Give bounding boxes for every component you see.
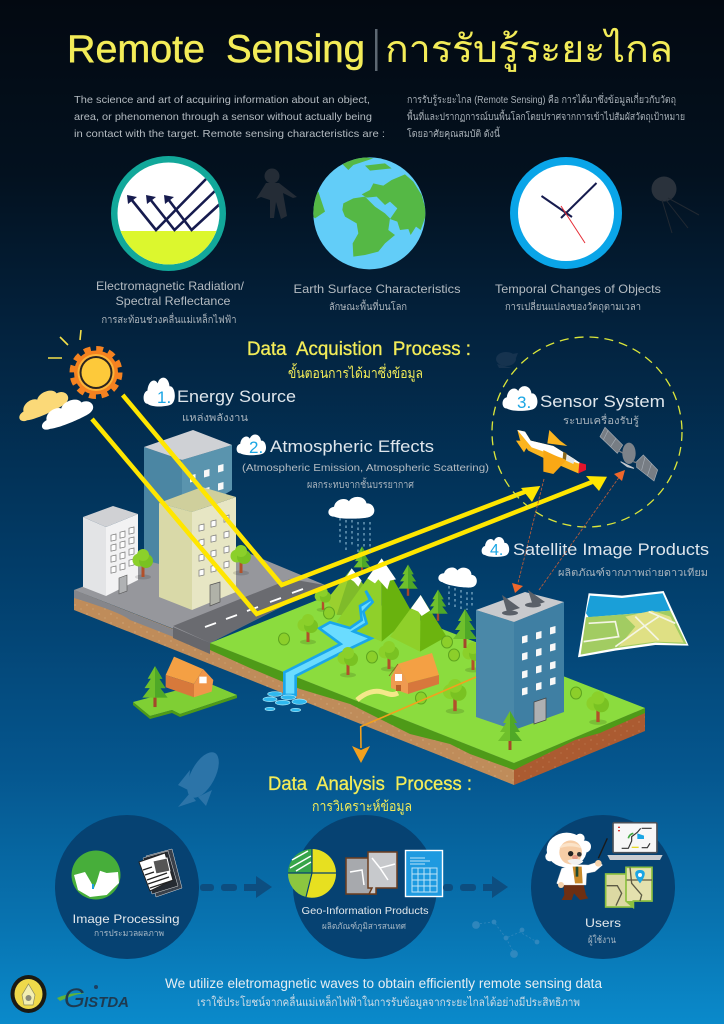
label: earth surface: Earth Surface Characteristics [294,282,460,296]
building: antenna tower [476,590,564,730]
footer message: เราใช้ประโยชน์จากคลื่นแม่เหล็กไฟฟ้าในการรับข้อมูลจากระยะไกลได้อย่างมีประสิทธิภาพ [197,994,580,1009]
heading: data analysis: Data Analysis Process : [268,774,472,795]
step 2: atmospheric effects: 2. [249,438,263,457]
heading: data analysis [268,774,472,815]
step 3: sensor system: ระบบเครื่องรับรู้ [563,413,640,427]
step 1: energy source: Energy Source [177,387,296,406]
label: image processing [72,912,180,938]
icon: sun [48,330,120,396]
intro text: english: The science and art of acquiring information about an object, [74,94,370,106]
river and waterfall [263,591,373,712]
label: geo-information: ผลิตภัณฑ์ภูมิสารสนเทศ [322,921,407,932]
panel: image processing [55,815,199,959]
label: users: Users [585,916,621,930]
label: image processing: การประมวลผลภาพ [94,928,164,938]
rain clouds [328,497,479,610]
building: beige tower [159,487,236,610]
icon: paper map pair [346,852,397,894]
ghost robot silhouette [496,352,518,368]
icon: pie chart [288,849,336,898]
data link lines [512,470,625,593]
label: earth surface: ลักษณะพื้นที่บนโลก [329,299,407,313]
green island [210,590,645,785]
path to cabin [357,691,398,700]
intro text: thai: โดยอาศัยคุณสมบัติ ดังนี้ [407,126,501,140]
label: image processing: Image Processing [72,912,180,926]
intro text: thai: พื้นที่และปรากฏการณ์บนพื้นโลกโดยปราศจากการเข้าไปสัมผัสวัตถุเป้าหมาย [407,109,685,123]
arrow: products to users [443,876,508,898]
label: users [585,916,621,946]
title [67,28,673,72]
step 4: satellite image products [482,537,709,579]
step 2: atmospheric effects: Atmospheric Effects [270,437,434,456]
mountains [327,558,447,652]
step 4: satellite image products: Satellite Image Products [513,540,709,559]
trees on island [278,546,609,725]
icon: small globe [72,850,120,900]
heading: data acquisition: ขั้นตอนการได้มาซึ่งข้อมูล [288,363,423,382]
icon: spectral reflectance circle [110,156,230,271]
isometric landscape [74,430,645,785]
heading: data acquisition: Data Acquistion Process : [247,339,471,360]
icon: documents [139,849,182,897]
intro text: english: in contact with the target. Remote sensing characteristics are : [74,128,385,140]
step 3: sensor system [503,386,665,427]
icon: satellite [600,427,658,481]
intro text: english: area, or phenomenon through a sensor without actually being [74,111,372,123]
icon: data table [406,850,442,896]
step 2: atmospheric effects: ผลกระทบจากชั้นบรรยากาศ [307,477,415,491]
label: spectral reflectance: Spectral Reflectance [116,294,231,308]
icon: earth globe [312,157,427,269]
title: การรับรู้ระยะไกล [385,28,673,72]
step 4: satellite image products: ผลิตภัณฑ์จากภาพถ่ายดาวเทียม [558,567,708,579]
label: spectral reflectance [96,279,245,326]
footer message [165,976,602,1009]
icon: plane [516,430,586,474]
label: geo-information: Geo-Information Products [302,905,428,917]
icon: map with pin [606,867,652,907]
icon: scientist [545,833,607,900]
label: temporal changes [495,282,661,313]
feature labels [96,279,661,326]
panel: geo-information products [288,815,442,959]
label: temporal changes: การเปลี่ยนแปลงของวัตถุตามเวลา [505,299,641,313]
ghost rocket [178,747,225,807]
house on island [389,653,439,694]
label: temporal changes: Temporal Changes of Objects [495,282,661,296]
logo: GISTDA: GISTDA [64,983,129,1013]
icon: astronaut silhouette [256,168,297,219]
small island with cabin [133,657,237,719]
intro text: thai: การรับรู้ระยะไกล (Remote Sensing) คือ การได้มาซึ่งข้อมูลเกี่ยวกับวัตถุ [407,92,676,106]
heading: data acquisition [247,339,471,382]
step 2: atmospheric effects [237,434,489,491]
heading: data analysis: การวิเคราะห์ข้อมูล [312,798,412,815]
building: white [83,506,138,596]
step 1: energy source [144,378,296,424]
title: Sensing [226,28,365,71]
label: users: ผู้ใช้งาน [588,934,616,946]
icon: clock [510,157,622,269]
logo: agency seal [10,975,46,1013]
step 3: sensor system: 3. [517,393,531,412]
label: spectral reflectance: การสะท้อนช่วงคลื่นแม่เหล็กไฟฟ้า [102,312,236,326]
ghost constellation [472,920,539,958]
footer message: We utilize eletromagnetic waves to obtain efficiently remote sensing data [165,976,602,991]
icon: map [578,591,689,657]
icon: clouds near sun [14,384,96,433]
label: geo-information [302,905,428,932]
icon: laptop [607,823,663,860]
step 4: satellite image products: 4. [490,542,503,559]
step 1: energy source: แหล่งพลังงาน [182,413,248,424]
city block [74,538,325,664]
intro text: english [74,94,385,140]
step 3: sensor system: Sensor System [540,392,665,411]
arrow: image processing to products [200,876,272,898]
label: earth surface [294,282,460,313]
intro text: thai [407,92,685,140]
title: Remote [67,28,205,71]
building: blue tower [144,430,232,570]
step 2: atmospheric effects: (Atmospheric Emission, Atmospheric Scattering) [242,463,489,474]
panel: users [531,815,675,959]
sensor system ring [492,337,682,527]
orange output arrow [352,677,476,763]
icon: sputnik silhouette [652,176,699,233]
label: spectral reflectance: Electromagnetic Radiation/ [96,279,245,293]
arrows: reflected sunlight [92,395,607,614]
step 1: energy source: 1. [157,388,171,407]
satellite dishes [502,590,545,616]
